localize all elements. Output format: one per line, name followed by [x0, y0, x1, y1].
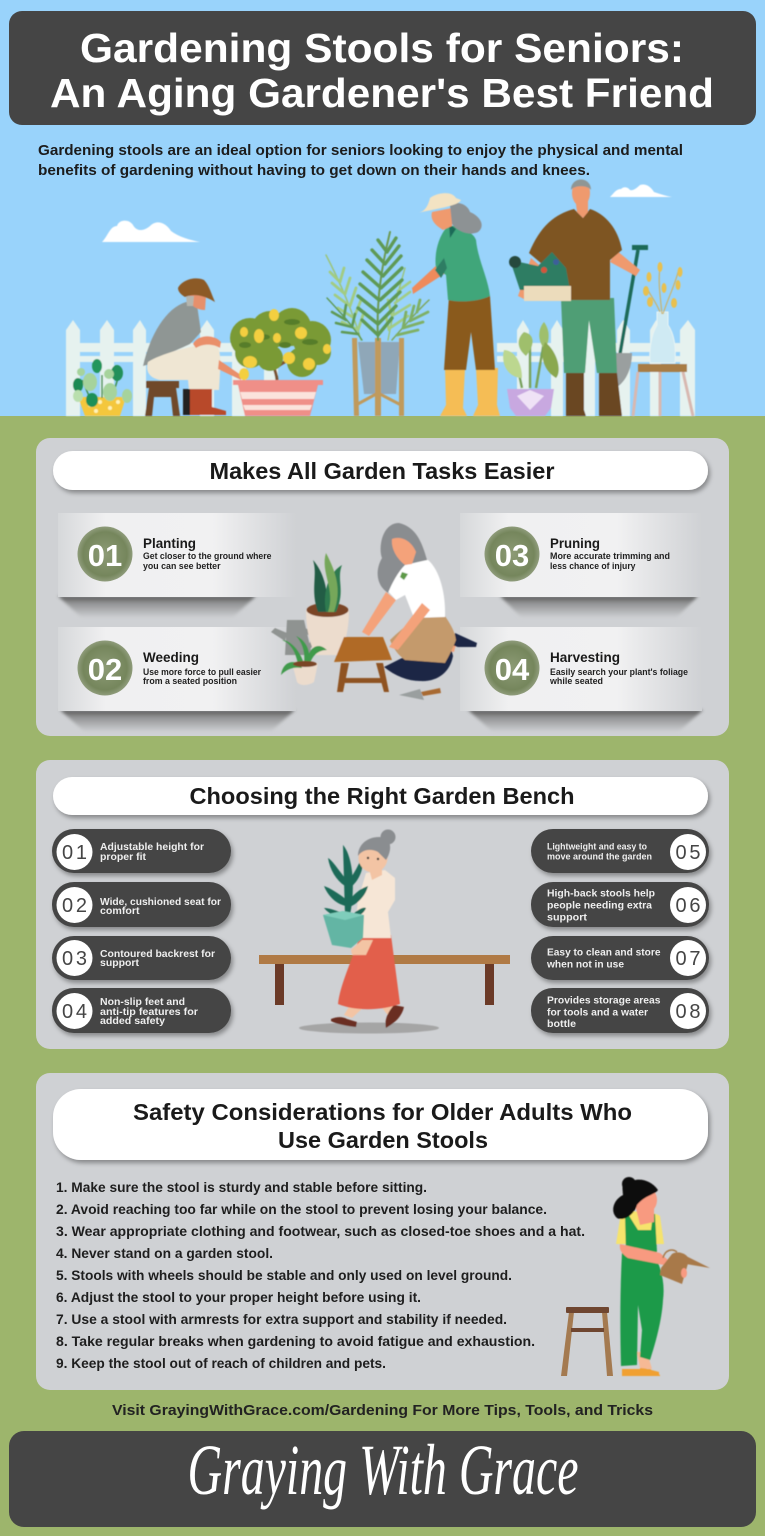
seated gardener on stool [143, 278, 241, 416]
central frond [378, 232, 390, 340]
item 06: High-back stools help [547, 888, 655, 900]
item 07: 07 [676, 948, 700, 970]
dark pants and shoe [384, 648, 453, 681]
stool illustration [561, 1307, 613, 1376]
card: planting: Get closer to the ground where [143, 551, 272, 561]
card: pruning: less chance of injury [550, 561, 636, 571]
heading pill [53, 451, 708, 490]
item 08: for tools and a water [547, 1006, 648, 1018]
item 03: 03 [62, 948, 87, 970]
lower left dark frond [327, 298, 362, 340]
safety list: 9. Keep the stool out of reach of children and pets. [56, 1356, 386, 1371]
item 02 [52, 882, 231, 927]
item 07: when not in use [546, 958, 624, 970]
footer banner with brand name: Graying With Grace [188, 1430, 578, 1510]
safety list [56, 1180, 585, 1371]
lemon tree in striped pot [230, 308, 331, 416]
watering can [271, 620, 314, 655]
near arm [389, 603, 430, 650]
card: harvesting: while seated [549, 676, 603, 686]
white picket fence [66, 320, 695, 416]
panel: safety considerations [36, 1073, 729, 1390]
card: weeding: Weeding [143, 650, 199, 665]
safety list: 4. Never stand on a garden stool. [56, 1246, 273, 1261]
woman kneeling at stool with plants [271, 523, 477, 700]
item 05: 05 [676, 842, 700, 864]
hair [378, 523, 427, 593]
card: weeding: from a seated position [143, 676, 237, 686]
garden scene illustration [66, 180, 695, 416]
card: pruning: 03 [495, 538, 529, 573]
safety list: 7. Use a stool with armrests for extra support and stability if needed. [56, 1312, 507, 1327]
card: planting [58, 513, 296, 618]
item 07 [531, 936, 709, 980]
white shirt [385, 560, 445, 618]
item 04: Non-slip feet and [100, 996, 185, 1008]
wood stool [334, 637, 392, 662]
card: weeding: Use more force to pull easier [143, 667, 261, 677]
intro text: benefits of gardening without having to get down on their hands and knees. [38, 162, 590, 179]
heading pill: Choosing the Right Garden Bench [190, 783, 574, 809]
snake plant in pot [306, 604, 349, 655]
palm plant on wood stand [326, 232, 429, 416]
right light frond [388, 268, 405, 340]
item 05: move around the garden [547, 852, 652, 862]
safety list: 2. Avoid reaching too far while on the stool to prevent losing your balance. [56, 1202, 547, 1217]
heading pill: Makes All Garden Tasks Easier [210, 458, 555, 484]
panel: choosing the right garden bench [36, 760, 729, 1049]
card: pruning: More accurate trimming and [550, 551, 670, 561]
safety list: 8. Take regular breaks when gardening to avoid fatigue and exhaustion. [56, 1334, 535, 1349]
panel: makes all garden tasks easier [36, 438, 729, 736]
title banner [9, 11, 756, 125]
apron [390, 616, 456, 663]
card: pruning: Pruning [550, 536, 600, 551]
heading pill [53, 1089, 708, 1160]
small pot plant left [73, 359, 132, 416]
item 08: bottle [547, 1018, 576, 1030]
item 04: anti-tip features for [100, 1006, 198, 1018]
woman with watering can [613, 1177, 710, 1376]
item 04: 04 [62, 1001, 87, 1023]
safety list: 1. Make sure the stool is sturdy and stable before sitting. [56, 1180, 427, 1195]
woman carrying potted plant [299, 830, 439, 1034]
item 01: Adjustable height for [100, 841, 204, 853]
card: harvesting: Easily search your plant's foliage [550, 667, 688, 677]
item 06: 06 [676, 895, 700, 917]
leaves [324, 845, 368, 920]
card: harvesting: Harvesting [550, 650, 620, 665]
purple pot plant [503, 322, 559, 416]
item 02: comfort [100, 905, 140, 917]
intro text [38, 142, 683, 179]
far arm [362, 592, 396, 636]
title banner: An Aging Gardener's Best Friend [50, 70, 714, 116]
heading pill: Safety Considerations for Older Adults Who [133, 1099, 632, 1125]
card: planting: you can see better [143, 561, 221, 571]
item 05 [531, 829, 709, 873]
left light frond [326, 255, 361, 340]
intro text: Gardening stools are an ideal option for seniors looking to enjoy the physical and mental [38, 142, 683, 159]
heading pill: Use Garden Stools [278, 1127, 488, 1153]
item 03 [52, 936, 231, 980]
flower vase on side table [633, 262, 693, 416]
safety list: 5. Stools with wheels should be stable and only used on level ground. [56, 1268, 512, 1283]
card: planting: 01 [88, 538, 122, 573]
safety list: 6. Adjust the stool to your proper height before using it. [56, 1290, 421, 1305]
garden bench [259, 955, 510, 1005]
item 02: 02 [62, 895, 87, 917]
footer link text: Visit GrayingWithGrace.com/Gardening For More Tips, Tools, and Tricks [112, 1402, 653, 1419]
item 03: support [100, 957, 140, 969]
card: harvesting: 04 [495, 652, 530, 687]
sky background [0, 0, 765, 416]
title banner: Gardening Stools for Seniors: [80, 25, 684, 71]
card: weeding: 02 [88, 652, 122, 687]
card: planting: Planting [143, 536, 196, 551]
card: harvesting [460, 627, 703, 732]
item 01: 01 [62, 842, 87, 864]
heading pill [53, 777, 708, 815]
card: pruning [460, 513, 702, 618]
item 03: Contoured backrest for [100, 948, 215, 960]
cloud right [610, 184, 672, 197]
cloud left [102, 221, 200, 242]
item 04: added safety [100, 1015, 165, 1027]
footer banner with brand name [9, 1430, 756, 1527]
item 01 [52, 829, 231, 873]
item 05: Lightweight and easy to [547, 842, 647, 852]
shovel [620, 250, 638, 354]
right dark frond [392, 300, 429, 340]
item 06: people needing extra [547, 900, 652, 912]
small potted plant [292, 663, 318, 685]
safety list: 3. Wear appropriate clothing and footwear, such as closed-toe shoes and a hat. [56, 1224, 585, 1239]
item 08: Provides storage areas [547, 994, 661, 1006]
item 01: proper fit [100, 851, 146, 863]
item 06: support [547, 912, 588, 924]
item 08 [531, 988, 709, 1033]
item 07: Easy to clean and store [547, 946, 661, 958]
item 08: 08 [676, 1001, 700, 1023]
green ground background [0, 416, 765, 1536]
item 06 [531, 882, 709, 927]
item 04 [52, 988, 231, 1033]
item 02: Wide, cushioned seat for [100, 896, 221, 908]
card: weeding [58, 627, 296, 732]
trowel [399, 689, 424, 700]
standing man with box and shovel [509, 180, 648, 416]
standing woman with hat [412, 193, 500, 416]
